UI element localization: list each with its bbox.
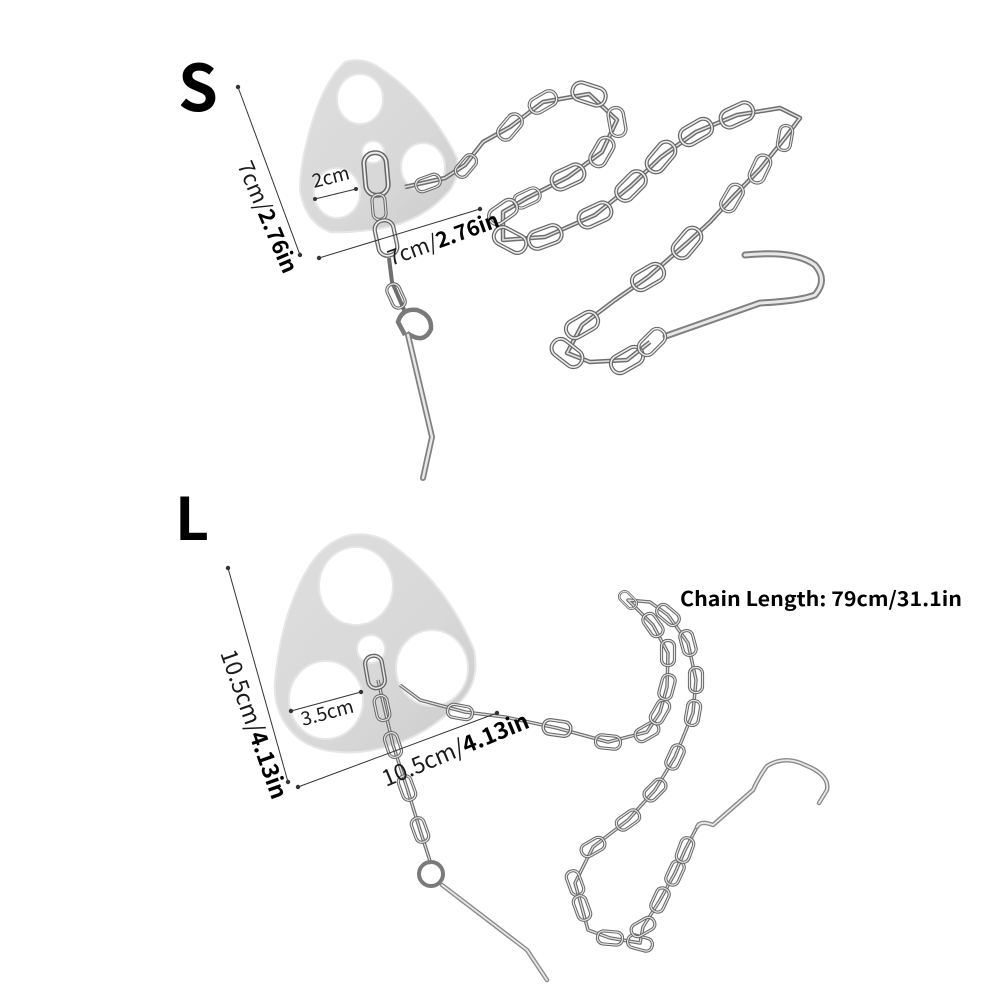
large product: plate, chains and hooks [275,534,827,980]
chain length note: Chain Length: 79cm/31.1in [680,583,962,612]
large plate with holes [275,534,476,752]
L height dimension: 10.5cm/4.13in [213,644,298,803]
small long chain [405,80,800,376]
small short chain with pin [363,152,432,478]
size label L: L [175,472,209,557]
size label S: S [178,38,218,130]
S width dimension [317,204,503,273]
L width dimension: 10.5cm/4.13in [376,702,533,793]
large long chain [400,589,702,953]
S hole diameter: 2cm [309,158,352,194]
S height dimension: 7cm/2.76in [231,155,307,278]
L hole diameter: 3.5cm [298,692,356,732]
small J hook [635,254,822,359]
small plate with holes [300,60,458,232]
S width dimension: 7cm/2.76in [383,204,503,273]
small product: plate, chains and hooks [300,60,822,478]
L width dimension [296,702,533,793]
L height dimension [213,566,298,803]
large short chain with pin [364,655,547,980]
large S hook [697,760,827,827]
S height dimension [231,85,307,278]
